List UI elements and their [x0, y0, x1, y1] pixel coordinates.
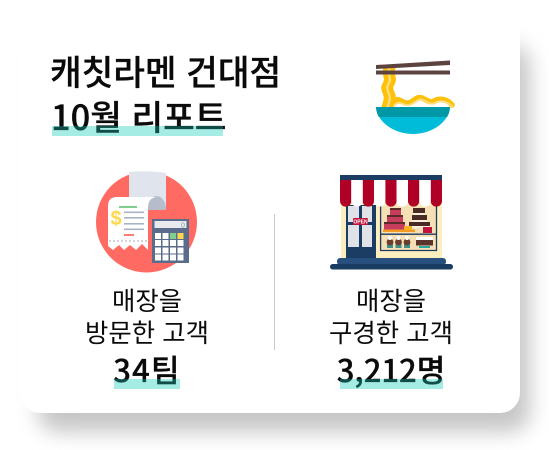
- value highlight: [340, 379, 443, 389]
- receipt lines: [124, 212, 144, 230]
- value highlight: [114, 379, 180, 389]
- title line 2: 10월 리포트: [51, 90, 226, 140]
- text block: visitors: [85, 282, 209, 391]
- tiered cake: [384, 209, 405, 230]
- divider: [274, 214, 275, 350]
- noodles: [384, 68, 452, 107]
- door: OPEN: [353, 220, 368, 226]
- dollar sign: $: [110, 208, 122, 230]
- wall: [341, 200, 442, 258]
- label line 2: 방문한 고객: [85, 314, 209, 350]
- base: [330, 258, 453, 270]
- label line 1: 매장을: [356, 282, 426, 318]
- title line 1: 캐칫라멘 건대점: [50, 45, 281, 95]
- red circle: [96, 172, 197, 272]
- back paper: [129, 171, 166, 210]
- chocolate cake: [409, 208, 430, 228]
- card shadow: [38, 45, 530, 432]
- value: 34팀: [113, 346, 181, 391]
- text block: viewers: [329, 282, 453, 391]
- receipt: [108, 197, 158, 250]
- icon: receipt and calculator: [96, 171, 197, 272]
- icon: storefront: [330, 175, 453, 270]
- title highlight: [52, 126, 223, 136]
- cupcakes: [387, 236, 410, 248]
- chopsticks: [376, 60, 450, 74]
- label line 1: 매장을: [112, 282, 182, 318]
- calculator: 0: [181, 222, 185, 230]
- sliced cake: [416, 237, 433, 248]
- label line 2: 구경한 고객: [329, 314, 453, 350]
- value: 3,212명: [337, 346, 445, 391]
- paper curl: [148, 196, 166, 210]
- bowl: [376, 107, 450, 134]
- icon: noodle bowl: [376, 60, 455, 134]
- awning: [340, 175, 442, 207]
- title: [50, 45, 281, 140]
- shop window: [380, 206, 437, 251]
